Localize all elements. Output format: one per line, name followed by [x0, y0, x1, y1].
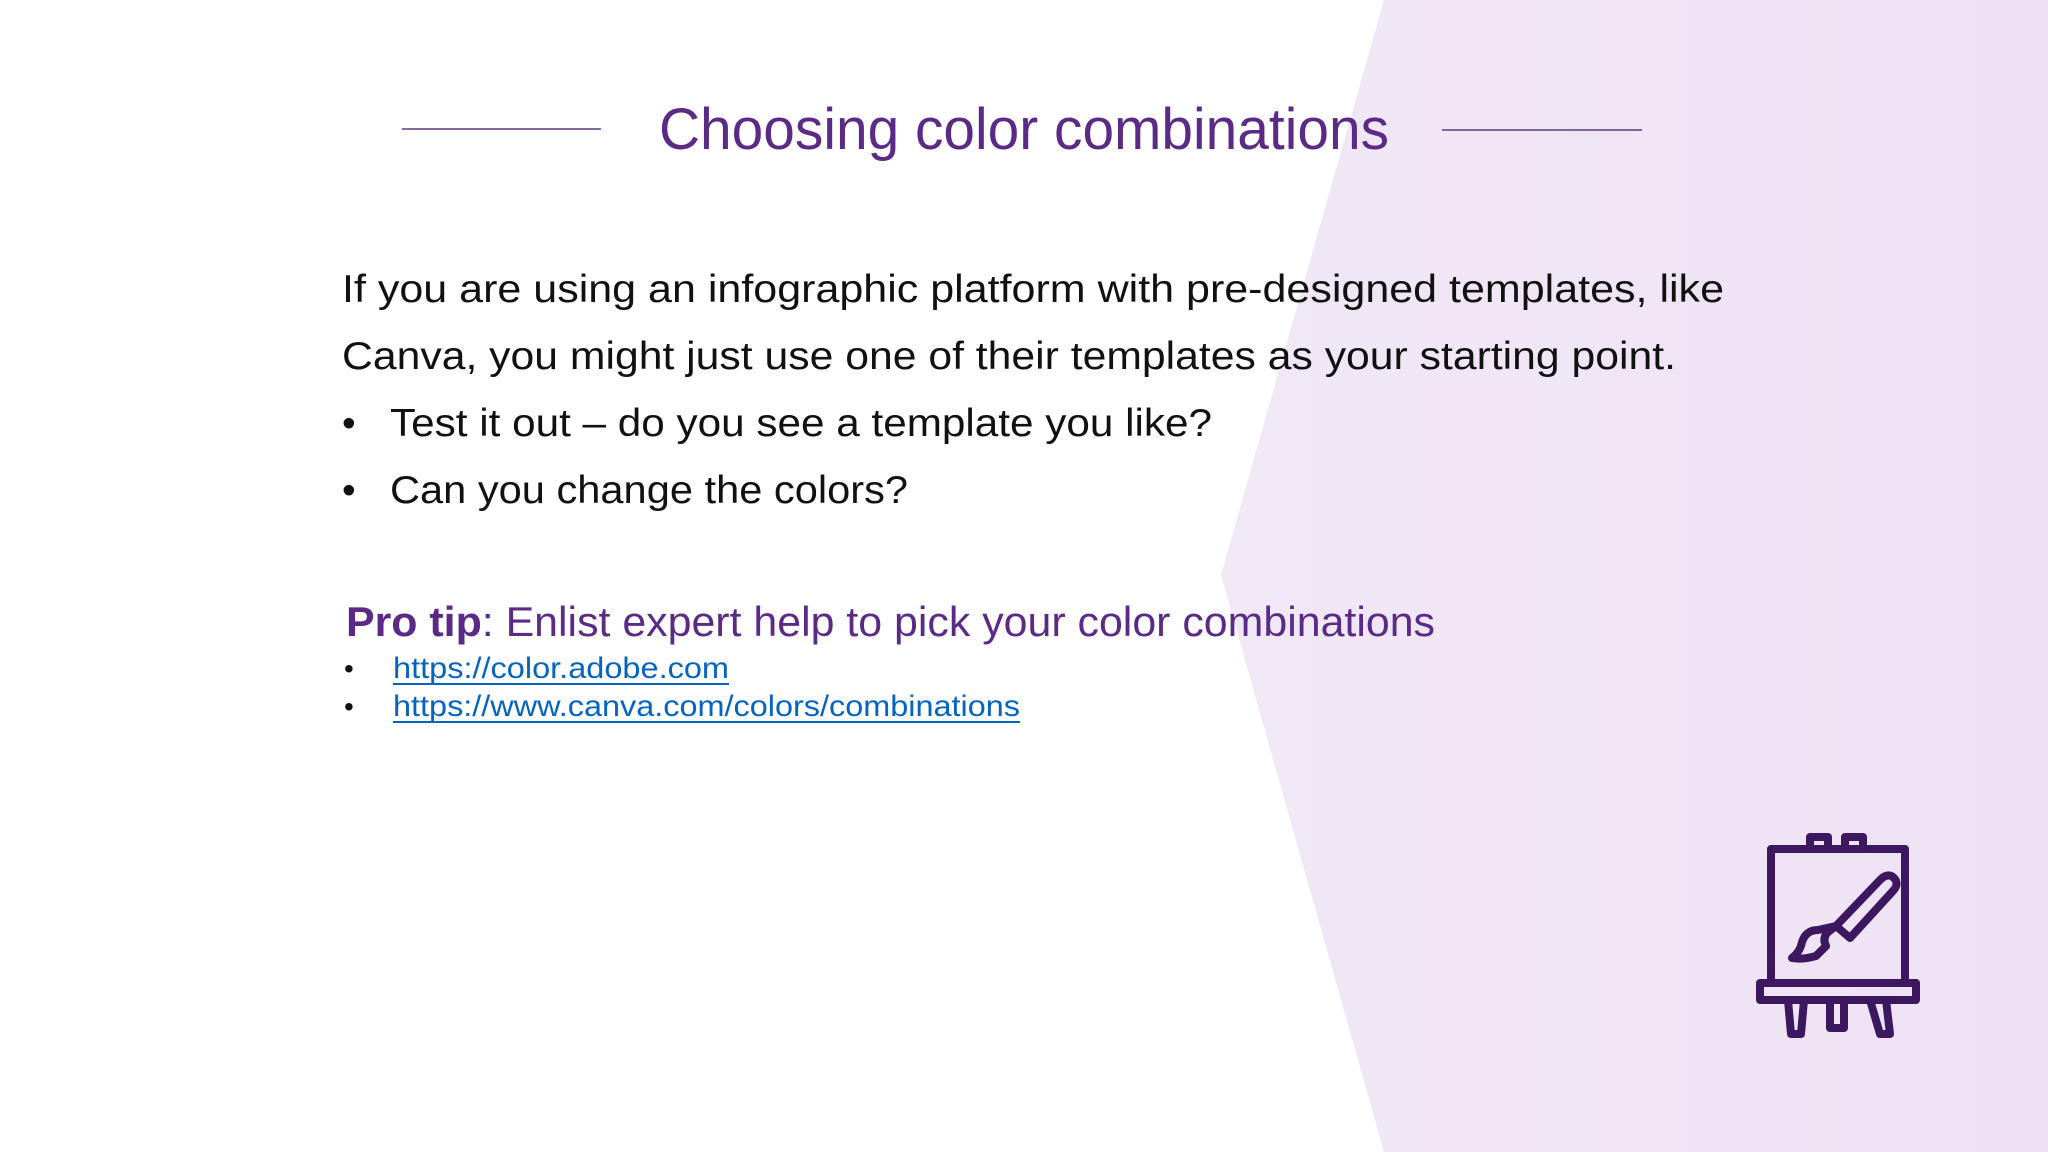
- body text: Can you change the colors?: [390, 469, 908, 512]
- background shape: lavender panel: [1221, 0, 2048, 1152]
- icon: easel with paintbrush: [1760, 837, 1916, 1034]
- pro tip: https://www.canva.com/colors/combinations: [393, 690, 1020, 723]
- pro tip: [344, 598, 1435, 723]
- pro tip: •: [344, 653, 354, 684]
- body text: [342, 268, 1724, 512]
- pro tip: Pro tip: Enlist expert help to pick your color combinations: [346, 598, 1435, 645]
- body text: Test it out – do you see a template you like?: [390, 402, 1212, 445]
- pro tip: https://color.adobe.com: [393, 652, 729, 685]
- body text: •: [342, 469, 356, 512]
- body text: If you are using an infographic platform with pre-designed templates, like: [342, 268, 1724, 311]
- body text: Canva, you might just use one of their templates as your starting point.: [342, 335, 1676, 378]
- title: Choosing color combinations: [659, 97, 1389, 162]
- pro tip: •: [344, 691, 354, 722]
- body text: •: [342, 402, 356, 445]
